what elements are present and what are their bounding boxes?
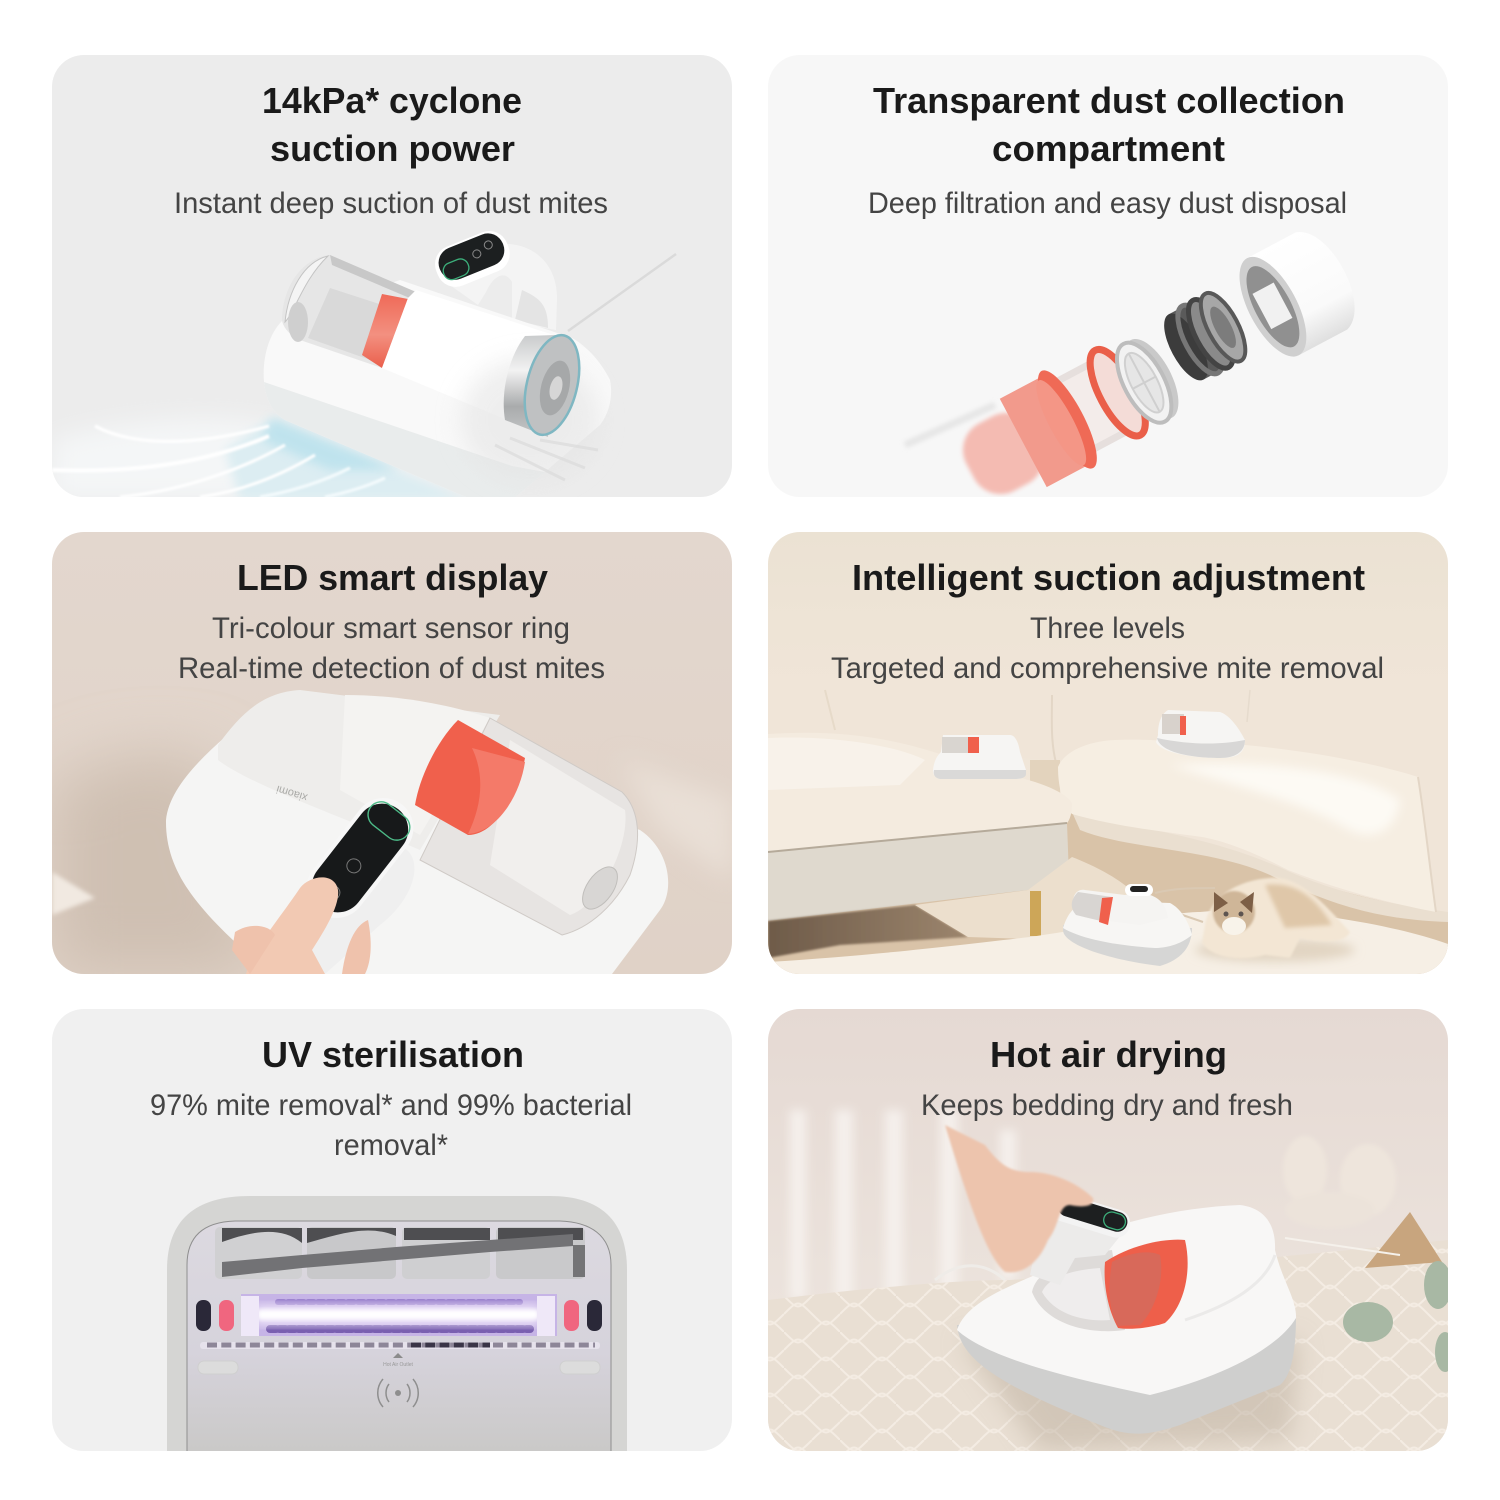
handle (440, 244, 557, 330)
illustration: vacuum with hand (935, 1125, 1296, 1434)
panel: suction power (52, 55, 732, 500)
grips (198, 1361, 600, 1374)
light floor patch (915, 857, 1145, 940)
sofa leg (1030, 891, 1041, 936)
white cap (1240, 257, 1354, 357)
subtitle: 97% mite removal* and 99% bacterial (150, 1089, 632, 1122)
icon: wireless symbol (378, 1379, 418, 1407)
translucent rear (464, 362, 596, 472)
panel background (768, 1009, 1448, 1451)
cord (935, 1266, 1005, 1280)
illustration: vacuum close-up (166, 690, 668, 974)
title: Hot air drying (990, 1034, 1227, 1075)
glass section (282, 286, 408, 368)
title: LED smart display (237, 557, 548, 598)
wood floor (768, 800, 1448, 974)
rug (768, 910, 1448, 974)
panel: dust compartment (870, 86, 1355, 497)
toys (1283, 1136, 1396, 1228)
outer shell (167, 1196, 627, 1460)
illustration: living room (768, 690, 1448, 974)
subtitle: Real-time detection of dust mites (178, 652, 605, 685)
display (312, 801, 413, 912)
arrow and label (383, 1353, 413, 1368)
illustration: mattress air flow (52, 418, 480, 500)
subtitle: Three levels (1030, 612, 1185, 645)
red band (1105, 1240, 1188, 1329)
subtitle: removal* (334, 1129, 448, 1162)
vacuum: floor (1063, 884, 1192, 966)
title (873, 80, 1345, 169)
wooden toy (1365, 1212, 1442, 1268)
top panel (218, 690, 500, 850)
red band (415, 720, 525, 835)
subtitle (150, 1089, 632, 1162)
right sofa ledge (1072, 812, 1448, 922)
hand (246, 877, 338, 974)
display (1041, 1188, 1133, 1241)
base upper and body (957, 1205, 1296, 1395)
glass (1032, 1250, 1125, 1331)
grip (280, 845, 414, 974)
panel background (768, 532, 1448, 974)
title: UV sterilisation (262, 1034, 524, 1075)
glass cup (420, 718, 638, 935)
panel: hot air drying (768, 1009, 1455, 1451)
vacuum: right seat (1156, 690, 1250, 758)
back sofa (768, 690, 1448, 920)
base (264, 280, 611, 453)
subtitle: Targeted and comprehensive mite removal (831, 652, 1384, 685)
subtitle (180, 616, 604, 678)
inner plate (187, 1221, 611, 1460)
title: Transparent dust collection (873, 80, 1345, 121)
right sofa seat (1058, 740, 1436, 912)
xiaomi logo: xiaomi (275, 783, 309, 803)
subtitle: Deep filtration and easy dust disposal (868, 187, 1347, 220)
panel: UV sterilisation (52, 1009, 732, 1460)
illustration: vacuum underside (167, 1196, 627, 1460)
sofa shadow (768, 905, 968, 958)
panel background (768, 55, 1448, 497)
hand (945, 1125, 1093, 1272)
base lower (957, 1315, 1296, 1434)
cat (1195, 878, 1355, 962)
brush windows (215, 1227, 585, 1279)
base vent ribs (495, 438, 598, 480)
title (262, 80, 522, 169)
body (345, 695, 466, 711)
left cushion (768, 733, 1072, 852)
base (166, 740, 668, 974)
red cup (960, 346, 1149, 496)
illustration: exploded dust cup (905, 257, 1354, 496)
panel: suction adjustment (768, 532, 1448, 974)
cord (1155, 888, 1215, 922)
vacuum: left seat (933, 735, 1026, 779)
white body (382, 292, 416, 368)
subtitle: Tri-colour smart sensor ring (212, 612, 570, 645)
mattress (768, 1240, 1448, 1451)
subtitle: Keeps bedding dry and fresh (921, 1089, 1293, 1122)
body shade (1185, 1255, 1275, 1320)
UV lamp bay (241, 1294, 557, 1336)
illustration: nursery (768, 1110, 1455, 1451)
arrow and label: Hot Air Outlet (383, 1362, 413, 1368)
title: 14kPa* cyclone (262, 80, 522, 121)
subtitle: Instant deep suction of dust mites (174, 187, 608, 220)
title: Intelligent suction adjustment (852, 557, 1365, 598)
metal motor (504, 335, 556, 437)
red band (362, 294, 408, 368)
illustration: fabric shadows (52, 756, 732, 974)
filter ring (1115, 339, 1178, 425)
panel background (52, 532, 732, 974)
panel background (52, 55, 732, 497)
handle (1030, 1210, 1125, 1285)
panel background (52, 1009, 732, 1451)
side buttons (196, 1300, 602, 1331)
icon: power cord (568, 254, 676, 331)
title: compartment (992, 128, 1225, 169)
panel: LED display (52, 532, 732, 974)
title: suction power (270, 128, 515, 169)
left sofa base (768, 823, 1069, 921)
dark spring filter (1164, 290, 1248, 380)
display (435, 231, 510, 286)
illustration: mite vacuum (264, 225, 611, 500)
crib bars (790, 1110, 1016, 1300)
slot row (200, 1342, 600, 1349)
subtitle (831, 612, 1384, 685)
